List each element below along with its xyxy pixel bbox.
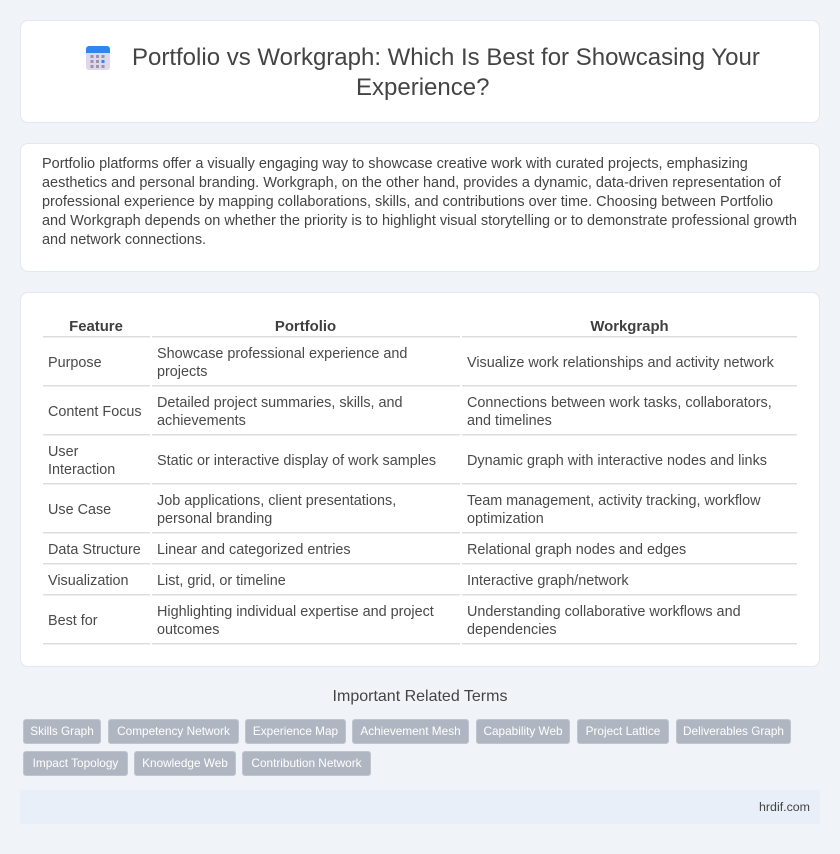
intro text	[42, 156, 797, 248]
tag: Knowledge Web	[142, 756, 228, 770]
text: Interactive graph/network	[467, 573, 629, 589]
text: Visualize work relationships and activity network	[467, 355, 774, 371]
text: Detailed project summaries, skills, and	[157, 395, 403, 411]
text: Showcase professional experience and	[157, 346, 407, 362]
text: Best for	[48, 613, 98, 629]
column header: Portfolio: Portfolio	[275, 319, 336, 335]
tag	[23, 719, 101, 744]
tag: Impact Topology	[33, 756, 118, 770]
tag	[242, 751, 371, 776]
footer	[20, 790, 820, 824]
text: and timelines	[467, 413, 552, 429]
tag: Capability Web	[483, 724, 563, 738]
intro text: and network connections.	[42, 232, 206, 248]
text: Static or interactive display of work samples	[157, 453, 436, 469]
row: Purpose	[48, 346, 774, 380]
comparison table	[43, 319, 797, 645]
tag: Achievement Mesh	[360, 724, 461, 738]
text: projects	[157, 364, 207, 380]
text: Interaction	[48, 462, 115, 478]
text: Purpose	[48, 355, 102, 371]
column header: Workgraph: Workgraph	[590, 319, 669, 335]
text: Highlighting individual expertise and project	[157, 604, 434, 620]
intro text: aesthetics and personal branding. Workgraph, on the other hand, provides a dynamic, data-driven representation of	[42, 175, 781, 191]
intro card	[20, 143, 820, 272]
text: User	[48, 444, 78, 460]
related terms heading: Important Related Terms	[333, 688, 507, 705]
tag	[577, 719, 669, 744]
row: Visualization	[48, 573, 629, 589]
text: achievements	[157, 413, 246, 429]
tag	[23, 751, 128, 776]
text: List, grid, or timeline	[157, 573, 286, 589]
related terms tags	[23, 719, 791, 776]
tag	[676, 719, 791, 744]
tag: Project Lattice	[586, 724, 660, 738]
title	[132, 44, 760, 101]
column header: Feature: Feature	[69, 319, 123, 335]
text: Linear and categorized entries	[157, 542, 351, 558]
row: Content Focus	[48, 395, 772, 429]
text: Use Case	[48, 502, 111, 518]
title: Portfolio vs Workgraph: Which Is Best for Showcasing Your	[132, 44, 760, 71]
row: Use Case	[48, 493, 761, 527]
text: Connections between work tasks, collaborators,	[467, 395, 772, 411]
text: outcomes	[157, 622, 219, 638]
text: optimization	[467, 511, 544, 527]
intro text: Portfolio platforms offer a visually engaging way to showcase creative work with curated projects, emphasizing	[42, 156, 748, 172]
tag: Contribution Network	[251, 756, 362, 770]
intro text: professional experience by mapping collaborations, skills, and contributions over time. Choosing between Portfolio	[42, 194, 773, 210]
footer source: hrdif.com	[759, 800, 810, 814]
text: personal branding	[157, 511, 272, 527]
row: User Interaction	[48, 444, 767, 478]
text: Understanding collaborative workflows and	[467, 604, 741, 620]
tag	[352, 719, 469, 744]
tag	[476, 719, 570, 744]
comparison table card	[20, 292, 820, 667]
tag: Experience Map	[253, 724, 338, 738]
text: Team management, activity tracking, workflow	[467, 493, 761, 509]
text: Job applications, client presentations,	[157, 493, 396, 509]
text: Data Structure	[48, 542, 141, 558]
text: Visualization	[48, 573, 129, 589]
title: Experience?	[356, 74, 489, 101]
tag: Deliverables Graph	[683, 724, 784, 738]
header card	[20, 20, 820, 123]
tag	[134, 751, 236, 776]
tag: Skills Graph	[30, 724, 94, 738]
row: Data Structure	[48, 542, 686, 558]
text: Dynamic graph with interactive nodes and links	[467, 453, 767, 469]
text: Relational graph nodes and edges	[467, 542, 686, 558]
text: Content Focus	[48, 404, 142, 420]
icon: calendar	[86, 46, 110, 70]
row: Best for	[48, 604, 741, 638]
tag	[108, 719, 239, 744]
tag: Competency Network	[117, 724, 230, 738]
text: dependencies	[467, 622, 557, 638]
intro text: and Workgraph depends on whether the priority is to highlight visual storytelling or to demonstrate professional growth	[42, 213, 797, 229]
tag	[245, 719, 346, 744]
